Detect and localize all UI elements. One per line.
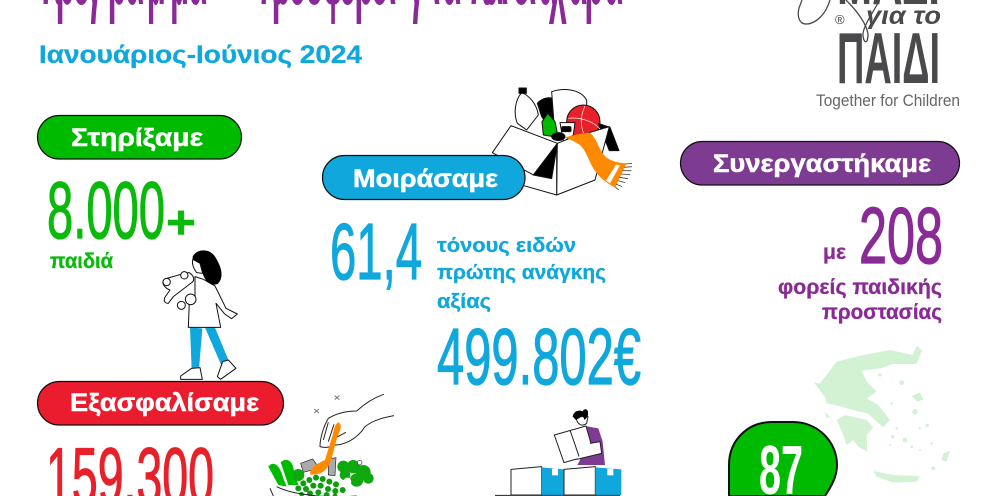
subtitle: period: Ιανουάριος-Ιούνιος 2024 <box>39 41 362 69</box>
logo: ® <box>835 12 845 27</box>
icon: person stacking boxes <box>495 409 621 495</box>
panel: partnerships <box>680 142 960 324</box>
text: tons of essentials: τόνους ειδών <box>437 235 576 257</box>
heading pill: Στηρίξαμε <box>38 116 242 159</box>
number: value in euros: 499.802€ <box>437 312 641 401</box>
heading pill: Στηρίξαμε: Στηρίξαμε <box>71 124 203 152</box>
text: with: με <box>823 241 846 264</box>
number: 208: 208 <box>859 191 943 280</box>
icon: box of goods <box>492 88 632 195</box>
icon: girl with teddy bear <box>163 250 237 379</box>
panel: distributed goods <box>322 88 641 495</box>
heading pill: Μοιράσαμε <box>322 156 525 200</box>
panel: supported children <box>38 116 242 379</box>
number bubble: 87 <box>729 422 837 496</box>
logo: Together for Children <box>816 91 960 110</box>
icon: hand with salad bowl <box>268 394 394 496</box>
title (cropped at top edge) <box>40 0 623 25</box>
number: 8.000+: 8.000 <box>47 166 165 256</box>
text: child protection bodies: φορείς παιδικής <box>778 276 942 299</box>
logo: για το <box>866 2 941 30</box>
number: 8.000+: + <box>166 196 196 248</box>
panel: secured meals <box>38 382 837 496</box>
heading pill: Συνεργαστήκαμε: Συνεργαστήκαμε <box>713 150 931 178</box>
label: children: παιδιά <box>50 250 113 273</box>
heading pill: Συνεργαστήκαμε <box>680 142 960 185</box>
text: tons of essentials <box>437 235 606 313</box>
text: tons of essentials: αξίας <box>437 291 491 313</box>
text: child protection bodies: προστασίας <box>822 301 942 324</box>
text: tons of essentials: πρώτης ανάγκης <box>437 262 606 284</box>
logo <box>798 0 960 110</box>
heading pill: Μοιράσαμε: Μοιράσαμε <box>353 165 498 193</box>
map of Greece <box>814 346 950 483</box>
heading pill: Εξασφαλίσαμε: Εξασφαλίσαμε <box>70 389 259 417</box>
number: 61,4 tons: 61,4 <box>330 207 422 296</box>
heading pill: Εξασφαλίσαμε <box>38 382 284 425</box>
text: child protection bodies <box>778 276 942 324</box>
